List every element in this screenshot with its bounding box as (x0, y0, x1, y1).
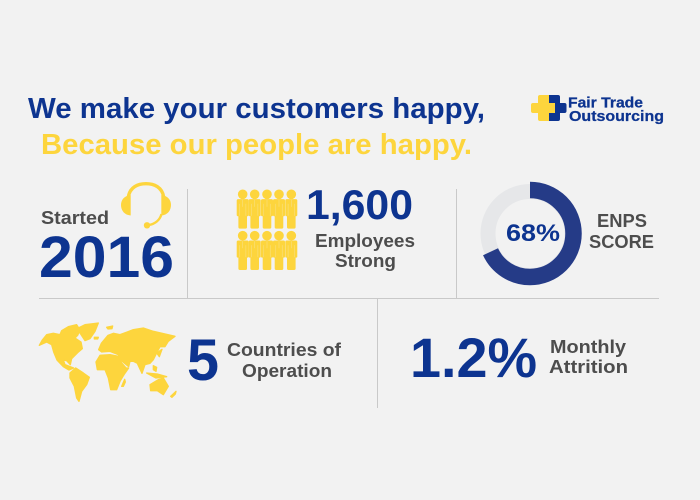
stat: 1,600 employees strong: Strong (335, 251, 396, 271)
logo: Fair Trade Outsourcing (531, 95, 664, 125)
stat: 1.2% monthly attrition (410, 326, 628, 389)
stat: 1.2% monthly attrition: Attrition (549, 357, 628, 377)
stat: 5 countries of operation: 5 (187, 328, 219, 393)
stat: 1,600 employees strong: Employees (315, 231, 415, 251)
icon: employees group (237, 190, 297, 270)
title: Because our people are happy. (41, 129, 472, 161)
stat: 1,600 employees strong: 1,600 (306, 181, 413, 228)
label: ENPS score: SCORE (589, 232, 654, 252)
logo: Fair Trade Outsourcing: Fair Trade (568, 96, 643, 112)
label: ENPS score (589, 211, 654, 252)
stat: 1.2% monthly attrition: Monthly (550, 337, 626, 357)
icon: headset (121, 184, 171, 228)
stat: 1.2% monthly attrition: 1.2% (410, 326, 537, 389)
logo: Fair Trade Outsourcing: Outsourcing (569, 109, 664, 125)
icon: world map (39, 323, 176, 401)
stat: 5 countries of operation (187, 328, 342, 393)
stat: 5 countries of operation: Countries of (227, 340, 342, 360)
stat: started 2016: 2016 (39, 225, 174, 290)
stat: started 2016 (39, 184, 174, 290)
donut chart: 68% ENPS (486, 190, 574, 277)
title (28, 93, 485, 161)
stat: 5 countries of operation: Operation (242, 361, 332, 381)
stat: started 2016: Started (41, 208, 109, 228)
title: We make your customers happy, (28, 93, 485, 125)
label: ENPS score: ENPS (597, 211, 647, 231)
stat: 1,600 employees strong (306, 181, 415, 271)
donut chart: 68% ENPS: 68% (506, 220, 560, 247)
